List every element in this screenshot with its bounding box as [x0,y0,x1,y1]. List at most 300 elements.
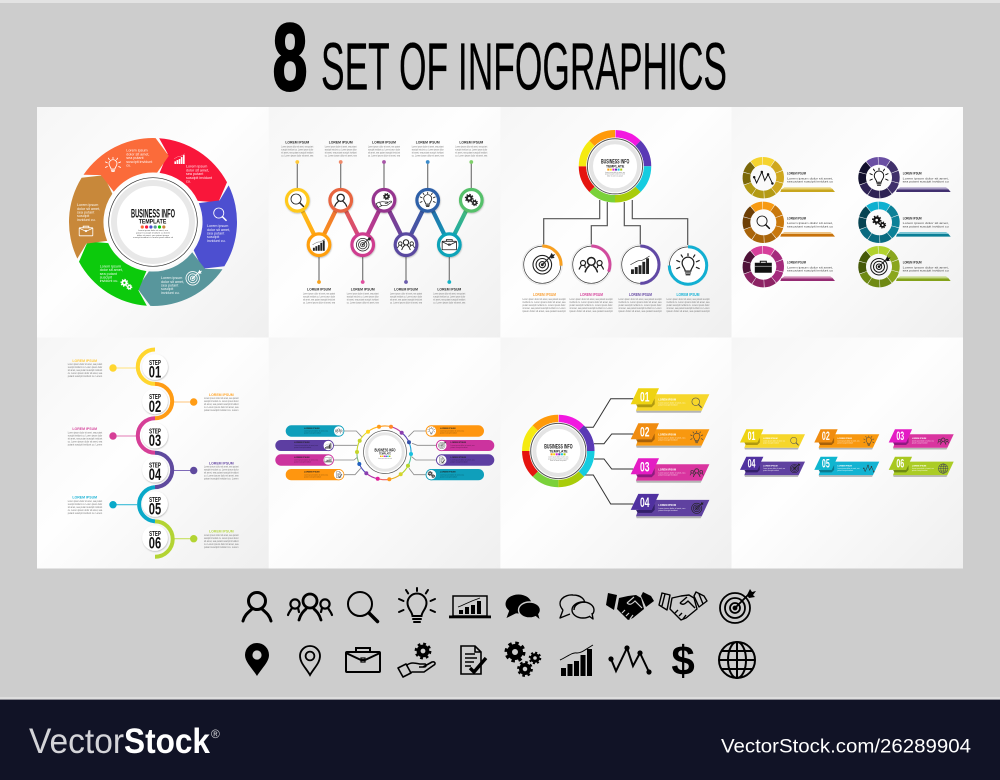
banner 01: Lorem ipsum dolor sit amet, sea [763,440,785,443]
progress circle text blocks: sit amet, sea putant suscipit invidunt cu. Lorem [522,306,566,310]
segment text: blue: suscipit [207,235,219,239]
timeline labels top: LOREM IPSUM [416,140,440,144]
hierarchy connectors [544,200,688,246]
panel: circular arrow cycle [43,116,263,328]
segment text: teal: sea putant [161,284,178,288]
step labels: 05 [149,500,161,518]
tag 03: 03 [640,458,650,474]
step text blocks: Lorem ipsum dolor sit amet, sea putant [204,464,239,468]
right pills: LOREM IPSUM [440,472,456,474]
step text blocks: Lorem ipsum dolor sit amet, sea putant [204,396,239,400]
step text blocks: putant suscipit invidunt cu. Lorem [68,374,103,378]
progress circle captions: LOREM IPSUM [629,292,652,297]
progress circle text blocks [522,297,710,313]
left pills [275,425,344,480]
right pills: Lorem ipsum dolor sit amet, sea [450,459,475,462]
hub centre: Lorem ipsum dolor sit amet [378,457,393,460]
step captions [72,359,234,534]
segment text: orange: cu. [126,164,131,168]
progress circle text blocks: sit amet, sea putant suscipit invidunt cu. Lorem [666,306,710,310]
footer logo: Stock [124,722,210,761]
hub ring: putant suscipit invidunt cu lorem [605,173,626,176]
segment text: green [100,264,123,283]
tag 04: Lorem ipsum dolor sit amet, sea [658,507,686,510]
segment text: red: sea putant [186,172,203,176]
timeline text blocks: sit amet, sea putant suscipit invidunt [433,298,465,302]
ring row: green: sea putant suscipit invidunt cu [903,269,949,273]
progress circle text blocks: ipsum dolor sit amet, sea putant suscipit [522,309,566,313]
segment text: blue: dolor sit amet, [207,228,230,232]
timeline text blocks: sit amet, sea putant suscipit invidunt [455,150,487,154]
tag 01: putant suscipit invidunt [658,403,678,406]
icon: target [720,589,756,623]
progress circle text blocks: sit amet, sea putant suscipit invidunt cu. Lorem [618,306,662,310]
right pills: LOREM IPSUM [440,428,456,430]
timeline text blocks: sit amet, sea putant suscipit invidunt [347,298,379,302]
ring row: purple: Lorem ipsum dolor sit amet, [903,176,949,180]
tag 01: Lorem ipsum dolor sit amet, sea [658,401,686,404]
left pills: LOREM IPSUM [294,457,310,459]
icon: growth chart [560,645,593,676]
timeline text blocks: cu. Lorem ipsum dolor sit amet, sea [433,300,466,304]
segment text: blue: sea putant [207,232,224,236]
segment text: green: suscipit [100,276,112,280]
tag 03 [631,458,709,483]
segment text: red [186,165,212,184]
segment text: blue: invidunt cu. [207,239,226,243]
icon: map pin [245,643,269,676]
banner 04: 04 [748,458,756,470]
timeline labels top: LOREM IPSUM [437,288,461,292]
left pills: putant suscipit invidunt [294,446,312,449]
banner 02: LOREM IPSUM [837,438,852,440]
ring row: green [855,243,951,290]
left pills: Lorem ipsum dolor sit amet, sea [304,473,328,476]
icon: outline handshake [659,592,707,620]
progress circle captions [533,292,700,297]
timeline labels top: LOREM IPSUM [351,288,375,292]
step text blocks: cu. Lorem ipsum dolor sit amet, sea [204,542,239,546]
icon: outline pin [300,646,320,675]
panel: zigzag timeline [281,140,488,304]
ring row: yellow [740,154,835,201]
timeline text blocks: Lorem ipsum dolor sit amet, sea putant [368,144,400,148]
progress circle text blocks: putant suscipit invidunt cu. Lorem ipsum dolor [522,303,566,307]
step text blocks: sit amet, sea putant suscipit invidunt [204,402,239,406]
step text blocks: cu. Lorem ipsum dolor sit amet, sea [204,405,239,409]
title: 8 [272,4,308,111]
timeline labels top: LOREM IPSUM [372,140,396,144]
step labels: STEP [149,426,161,436]
step text blocks: suscipit invidunt cu. Lorem ipsum dolor [204,468,239,472]
hub ring: TEMPLATE [606,165,625,169]
segment text: red: dolor sit amet, [186,168,209,172]
hub ring: Lorem ipsum dolor sit amet, sea [605,171,625,174]
banner 03: LOREM IPSUM [912,438,927,440]
step text blocks: suscipit invidunt cu. Lorem ipsum dolor [68,365,102,369]
right pills: putant suscipit invidunt [450,446,468,449]
step labels: STEP [149,529,161,538]
tag 01 [631,388,709,413]
segment text: teal: dolor sit amet, [161,280,184,284]
progress circle text blocks: ipsum dolor sit amet, sea putant suscipit [618,309,662,313]
segment text: green: invidunt cu. [100,279,118,283]
step text blocks: cu. Lorem ipsum dolor sit amet, sea [68,371,102,375]
timeline text blocks: Lorem ipsum dolor sit amet, sea putant [455,144,487,148]
icon: gears [506,643,540,676]
banner 05: 05 [822,458,830,470]
right pills: Lorem ipsum dolor sit amet, sea [440,430,464,432]
banner 05 [814,457,879,477]
step text blocks: suscipit invidunt cu. Lorem ipsum dolor [204,536,239,540]
step captions: LOREM IPSUM [72,427,97,431]
panel: six numbered banners [740,429,954,477]
hub ring: BUSINESS INFO [601,159,629,166]
step captions: LOREM IPSUM [209,461,234,465]
segment text: orange: sea putant [126,156,144,160]
step captions: LOREM IPSUM [72,359,97,363]
timeline text blocks: cu. Lorem ipsum dolor sit amet, sea [368,154,400,158]
ring row: orange [740,199,835,246]
step text blocks: Lorem ipsum dolor sit amet, sea putant [68,499,102,503]
step labels: 03 [149,432,161,450]
icon: briefcase [346,648,380,672]
ring row: orange: Lorem ipsum dolor sit amet, [787,221,833,225]
ring row: purple: sea putant suscipit invidunt cu [903,180,949,184]
timeline text blocks [281,144,488,304]
cycle hub text [131,209,175,239]
timeline text blocks: cu. Lorem ipsum dolor sit amet, sea [325,154,357,158]
banner 06: putant suscipit invidunt [912,469,928,472]
segment text: blue [207,224,230,243]
panel: segmented rings with labels [740,154,951,290]
left pills: LOREM IPSUM [304,472,320,474]
left pills: LOREM IPSUM [304,428,320,430]
panel: vertical steps 01-06 [68,350,239,557]
step labels: 06 [149,534,161,552]
step text blocks: cu. Lorem ipsum dolor sit amet, sea [68,508,102,512]
left pills: LOREM IPSUM [294,442,310,444]
timeline text blocks: suscipit invidunt cu. Lorem ipsum dolor [325,148,357,152]
progress circle text blocks: invidunt cu. Lorem ipsum dolor sit amet, sea [618,300,662,304]
banner 04: putant suscipit invidunt [763,469,779,472]
ring row: green: LOREM IPSUM [903,261,922,265]
timeline text blocks: Lorem ipsum dolor sit amet, sea putant [390,292,422,296]
step labels: STEP [149,495,161,504]
step stubs [109,364,197,542]
ring row: yellow: sea putant suscipit invidunt cu [787,180,833,184]
tag 02: putant suscipit invidunt [658,438,678,441]
step text blocks: putant suscipit invidunt cu. Lorem [68,511,103,515]
tag 04: 04 [640,494,650,510]
banner 06: Lorem ipsum dolor sit amet, sea [912,467,934,470]
icon set [243,588,756,684]
footer logo: ® [211,727,220,741]
segment text: orange: dolor sit amet, [126,152,149,156]
banner 06: 06 [896,458,904,470]
tag hub ring: dolor sit amet sea putant [550,459,567,462]
tag 02: 02 [640,423,650,439]
footer bar [0,697,1000,780]
panel: hub with numbered tags [526,388,709,518]
step captions: LOREM IPSUM [209,393,234,397]
segment text: red: suscipit invidunt [186,176,212,180]
timeline text blocks: sit amet, sea putant suscipit invidunt [281,150,313,154]
timeline labels top: LOREM IPSUM [394,288,418,292]
segment text: teal: suscipit [161,287,173,291]
step labels: STEP [149,358,161,367]
progress circle text blocks: putant suscipit invidunt cu. Lorem ipsum dolor [618,303,662,307]
banner 01: putant suscipit invidunt [763,442,779,445]
cycle hub text: suscipit invidunt cu lorem ipsum dolor sit [133,236,174,239]
step text blocks: putant suscipit invidunt cu. Lorem [204,476,239,480]
footer image id: VectorStock.com/26289904 [721,737,971,758]
banner 02: 02 [822,431,830,443]
timeline nodes [286,190,482,256]
tag 02: LOREM IPSUM [658,433,676,436]
segment text: tan: suscipit [77,214,89,218]
banner 01 [740,429,805,449]
left pills: Lorem ipsum dolor sit amet, sea [294,444,318,447]
progress circle text blocks: Lorem ipsum dolor sit amet, sea putant suscipit [618,297,662,301]
left pills: Lorem ipsum dolor sit amet, sea [294,459,318,462]
banner 05: LOREM IPSUM [837,466,852,468]
timeline text blocks: suscipit invidunt cu. Lorem ipsum dolor [281,148,313,152]
progress circle captions: LOREM IPSUM [580,292,603,297]
ring row: teal: sea putant suscipit invidunt cu [903,224,949,228]
progress circle text blocks: putant suscipit invidunt cu. Lorem ipsum dolor [570,303,613,307]
hub connectors [334,431,436,475]
timeline text blocks: cu. Lorem ipsum dolor sit amet, sea [281,154,314,158]
step captions: LOREM IPSUM [72,496,97,500]
right pills: putant suscipit invidunt [440,432,458,435]
progress circle text blocks: invidunt cu. Lorem ipsum dolor sit amet, sea [570,300,613,304]
progress circles [522,245,708,286]
segment text: green: Lorem ipsum [100,264,121,268]
banner 04: LOREM IPSUM [763,466,778,468]
icon: globe [719,642,755,678]
icon: checked document [461,646,486,674]
timeline text blocks: Lorem ipsum dolor sit amet, sea putant [325,144,357,148]
panel backgrounds grid [37,107,963,568]
banner 02: Lorem ipsum dolor sit amet, sea [837,440,860,443]
hub ring [582,134,648,199]
progress circle text blocks: putant suscipit invidunt cu. Lorem ipsum dolor [666,303,710,307]
step labels [149,358,162,552]
tag connectors [585,399,633,504]
segment text: tan: Lorem ipsum [77,203,98,207]
cycle hub text: dolor sit amet, sea putant ipsum [137,234,169,237]
step text blocks: putant suscipit invidunt cu. Lorem [204,545,239,549]
icon: person [243,592,271,621]
timeline text blocks: suscipit invidunt cu. Lorem ipsum dolor [368,148,400,152]
step text blocks: sit amet, sea putant suscipit invidunt [68,368,102,372]
tag 04: LOREM IPSUM [658,504,676,507]
stems and dots [295,160,473,284]
icon: people [288,594,332,620]
timeline text blocks: cu. Lorem ipsum dolor sit amet, sea [303,300,335,304]
timeline text blocks: suscipit invidunt cu. Lorem ipsum dolor [347,294,379,298]
banner 06: LOREM IPSUM [912,466,927,468]
segment text: green: sea putant [100,272,117,276]
tag hub ring: Lorem ipsum dolor sit amet, sea [548,456,568,458]
timeline text blocks: Lorem ipsum dolor sit amet, sea putant [303,292,335,296]
timeline text blocks: suscipit invidunt cu. Lorem ipsum dolor [433,294,465,298]
ring row: purple: LOREM IPSUM [903,172,922,176]
banner 03: putant suscipit invidunt [912,442,928,445]
banner 03: Lorem ipsum dolor sit amet, sea [912,440,934,443]
icon: filled handshake [606,592,654,620]
timeline text blocks: suscipit invidunt cu. Lorem ipsum dolor [455,148,487,152]
progress circle captions: LOREM IPSUM [533,292,556,297]
tag 03: LOREM IPSUM [658,468,676,471]
ring row: pink: LOREM IPSUM [787,261,806,265]
tag 03: Lorem ipsum dolor sit amet, sea [658,471,686,474]
step text blocks: suscipit invidunt cu. Lorem ipsum dolor [68,502,102,506]
segment text: teal: invidunt cu. [161,291,180,295]
hub beaded ring [355,425,413,481]
step text blocks: suscipit invidunt cu. Lorem ipsum dolor [204,399,239,403]
segment text: red: cu. [186,180,191,184]
ring row: pink [740,243,835,290]
timeline text blocks: sit amet, sea putant suscipit invidunt [325,150,357,154]
panel: hub with pill bars [275,425,494,481]
tag 04 [631,494,709,518]
right pills: Lorem ipsum dolor sit amet, sea [450,444,475,447]
tag hub ring: BUSINESS INFO [544,443,573,450]
ring row: green: Lorem ipsum dolor sit amet, [903,265,949,269]
right pills: Lorem ipsum dolor sit amet, sea [440,473,464,476]
left pills: putant suscipit invidunt [304,475,322,478]
timeline labels top: LOREM IPSUM [307,288,331,292]
icon: hand with gear [398,644,435,677]
timeline labels top: LOREM IPSUM [329,140,353,144]
step text blocks: sit amet, sea putant suscipit invidunt [204,539,239,543]
timeline text blocks: Lorem ipsum dolor sit amet, sea putant [281,144,313,148]
icon: magnifier [348,592,378,622]
icon: outline chat [560,595,594,619]
segment text: tan: sea putant [77,210,94,214]
cycle hub text: TEMPLATE [139,219,166,225]
segment text: red: Lorem ipsum [186,165,207,169]
progress circle text blocks: invidunt cu. Lorem ipsum dolor sit amet, sea [522,300,566,304]
timeline text blocks: cu. Lorem ipsum dolor sit amet, sea [412,154,444,158]
step text blocks [68,362,239,549]
icon: zigzag line [609,646,651,674]
step text blocks: Lorem ipsum dolor sit amet, sea putant [68,430,102,434]
banner 06 [889,457,954,477]
title [272,4,727,111]
right pills: putant suscipit invidunt [450,461,468,464]
segment text: green: dolor sit amet, [100,268,123,272]
step labels: 04 [149,466,162,484]
timeline text blocks: cu. Lorem ipsum dolor sit amet, sea [390,300,422,304]
right pills: putant suscipit invidunt [440,475,458,478]
tag 04: putant suscipit invidunt [658,509,678,512]
timeline labels top [285,140,483,292]
step labels: STEP [149,460,161,470]
tag hub ring: TEMPLATE [549,449,568,453]
timeline text blocks: Lorem ipsum dolor sit amet, sea putant [347,292,379,296]
ring row: teal: Lorem ipsum dolor sit amet, [903,221,949,225]
banner 01: LOREM IPSUM [763,438,778,440]
timeline text blocks: suscipit invidunt cu. Lorem ipsum dolor [303,294,335,298]
step labels: 01 [149,364,161,382]
step labels: STEP [149,392,161,401]
banner 04 [740,457,805,477]
banner 02: putant suscipit invidunt [837,442,854,445]
banner 05: Lorem ipsum dolor sit amet, sea [837,467,860,470]
progress circle captions: LOREM IPSUM [676,292,700,297]
progress circle text blocks: Lorem ipsum dolor sit amet, sea putant suscipit [666,297,710,301]
ring row: yellow: Lorem ipsum dolor sit amet, [787,176,833,180]
segment text: orange: Lorem ipsum [126,149,148,153]
timeline labels top: LOREM IPSUM [459,140,483,144]
step text blocks: Lorem ipsum dolor sit amet, sea putant [204,533,239,537]
progress circle text blocks: ipsum dolor sit amet, sea putant suscipit [666,309,710,313]
step captions: LOREM IPSUM [209,530,234,534]
footer logo [29,722,220,761]
segment text: tan: dolor sit amet, [77,207,100,211]
hub centre: TEMPLATE [379,453,391,456]
segment text: orange: suscipit invidunt [126,160,152,164]
segment text: orange [126,149,152,168]
step text blocks: Lorem ipsum dolor sit amet, sea putant [68,362,102,366]
step text blocks: putant suscipit invidunt cu. Lorem [204,408,239,412]
step text blocks: sit amet, sea putant suscipit invidunt [204,470,239,474]
ring row: orange: sea putant suscipit invidunt cu [787,224,833,228]
banner 02 [814,429,879,449]
ring row: pink: sea putant suscipit invidunt cu [787,269,833,273]
timeline text blocks: sit amet, sea putant suscipit invidunt [368,150,400,154]
progress circle text blocks: invidunt cu. Lorem ipsum dolor sit amet, sea [666,300,710,304]
icon: filled chat [506,594,540,619]
step text blocks: sit amet, sea putant suscipit invidunt [68,436,102,440]
timeline text blocks: sit amet, sea putant suscipit invidunt [412,150,444,154]
left pills: putant suscipit invidunt [294,461,312,464]
timeline text blocks: cu. Lorem ipsum dolor sit amet, sea [455,154,488,158]
step circles [142,354,168,551]
panel: hierarchy with progress circles [522,134,710,313]
progress circle text blocks: sit amet, sea putant suscipit invidunt cu. Lorem [570,306,613,310]
timeline text blocks: suscipit invidunt cu. Lorem ipsum dolor [390,294,422,298]
step arcs [138,350,173,557]
banner 05: putant suscipit invidunt [837,469,854,472]
hub centre: BUSINESS INFO [374,448,396,454]
progress circle text blocks: ipsum dolor sit amet, sea putant suscipit [570,309,613,313]
timeline icons [291,192,477,251]
segment text: teal: Lorem ipsum [161,276,182,280]
step text blocks: putant suscipit invidunt cu. Lorem [68,442,103,446]
progress circle text blocks: Lorem ipsum dolor sit amet, sea putant suscipit [522,297,566,301]
timeline text blocks: sit amet, sea putant suscipit invidunt [390,298,422,302]
right pills: LOREM IPSUM [450,457,466,459]
zigzag connectors [297,200,471,245]
tag 01: LOREM IPSUM [658,398,676,401]
tag 03: putant suscipit invidunt [658,473,678,476]
step labels: 02 [149,398,161,416]
banner 03: 03 [896,431,904,443]
timeline labels top: LOREM IPSUM [285,140,309,144]
left pills: Lorem ipsum dolor sit amet, sea [304,430,328,432]
hub ring: dolor sit amet sea putant [607,174,624,177]
tag 02 [631,423,709,448]
banner 01: 01 [748,431,756,443]
left pills: putant suscipit invidunt [304,432,322,435]
segment text: teal [161,276,184,295]
cycle hub text: putant suscipit invidunt cu lorem [136,232,171,234]
icon: light bulb [399,588,435,622]
